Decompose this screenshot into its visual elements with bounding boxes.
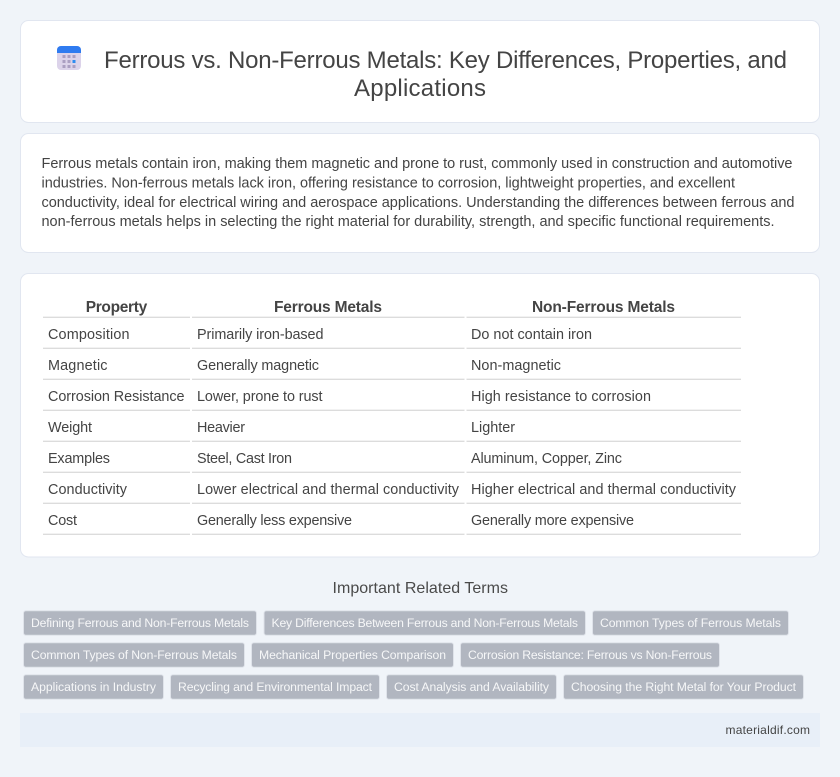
tag bbox=[252, 643, 454, 667]
tag: Recycling and Environmental Impact bbox=[178, 680, 373, 694]
footer bar: materialdif.com bbox=[726, 723, 810, 737]
table row: weight: Weight bbox=[48, 420, 92, 436]
table row: cost: Cost bbox=[48, 513, 77, 529]
tag: Key Differences Between Ferrous and Non-Ferrous Metals bbox=[272, 616, 578, 630]
tag: Defining Ferrous and Non-Ferrous Metals bbox=[31, 616, 249, 630]
table row: cost bbox=[48, 513, 634, 529]
tag bbox=[264, 611, 586, 635]
tag bbox=[592, 611, 788, 635]
table header: Non-Ferrous Metals bbox=[532, 299, 675, 316]
table row: composition: Composition bbox=[48, 327, 130, 343]
tag bbox=[386, 675, 556, 699]
text block: intro: non-ferrous metals helps in selecting the right material for durability, strength, and specific functional requirements. bbox=[42, 214, 774, 230]
table row: corrosion resistance bbox=[48, 389, 651, 405]
table row: examples: Steel, Cast Iron bbox=[197, 451, 292, 467]
tag bbox=[24, 643, 244, 667]
tag bbox=[24, 611, 256, 635]
table header bbox=[86, 299, 675, 316]
panel: title header bbox=[20, 20, 820, 122]
table row: composition: Do not contain iron bbox=[471, 327, 592, 343]
table row: corrosion resistance: Corrosion Resistance bbox=[48, 389, 184, 405]
tag bbox=[460, 643, 720, 667]
table row: examples: Aluminum, Copper, Zinc bbox=[471, 451, 622, 467]
table row: conductivity: Higher electrical and thermal conductivity bbox=[471, 482, 737, 498]
tag: Common Types of Ferrous Metals bbox=[600, 616, 781, 630]
table row: conductivity: Conductivity bbox=[48, 482, 128, 498]
icon: calendar bbox=[57, 46, 81, 70]
tag: Applications in Industry bbox=[31, 680, 157, 694]
table header: Ferrous Metals bbox=[274, 299, 382, 316]
tag: Corrosion Resistance: Ferrous vs Non-Ferrous bbox=[468, 648, 712, 662]
table row: weight: Heavier bbox=[197, 420, 245, 436]
title: Ferrous vs. Non-Ferrous Metals: Key Differences, Properties, and bbox=[104, 47, 787, 74]
title: Applications bbox=[354, 75, 486, 102]
tag: Cost Analysis and Availability bbox=[394, 680, 550, 694]
table header: Property bbox=[86, 299, 148, 316]
tag: Choosing the Right Metal for Your Product bbox=[571, 680, 797, 694]
text block: intro: industries. Non-ferrous metals lack iron, offering resistance to corrosion, lightweight properties, and excellent bbox=[42, 176, 735, 192]
table row: composition bbox=[48, 327, 592, 343]
table row: magnetic: Non-magnetic bbox=[471, 358, 561, 374]
table row: examples bbox=[48, 451, 622, 467]
title bbox=[104, 47, 787, 102]
table row: magnetic: Magnetic bbox=[48, 358, 108, 374]
table row: examples: Examples bbox=[48, 451, 110, 467]
text block: intro: Ferrous metals contain iron, making them magnetic and prone to rust, commonly used in construction and automotive bbox=[42, 156, 792, 172]
table row: cost: Generally more expensive bbox=[471, 513, 634, 529]
tag list: related terms bbox=[24, 611, 804, 699]
table row: conductivity bbox=[48, 482, 737, 498]
panel: comparison table bbox=[20, 274, 820, 557]
tag bbox=[564, 675, 804, 699]
text block: intro bbox=[42, 156, 794, 230]
panel: intro paragraph bbox=[20, 134, 820, 252]
tag bbox=[170, 675, 380, 699]
heading: related terms: Important Related Terms bbox=[332, 580, 508, 597]
tag: Mechanical Properties Comparison bbox=[259, 648, 446, 662]
table row: magnetic bbox=[48, 358, 561, 374]
text block: intro: conductivity, ideal for electrical wiring and aerospace applications. Understanding the differences between ferrous and bbox=[42, 195, 794, 211]
table row: weight: Lighter bbox=[471, 420, 515, 436]
table row: magnetic: Generally magnetic bbox=[197, 358, 319, 374]
table row: conductivity: Lower electrical and thermal conductivity bbox=[197, 482, 460, 498]
tag bbox=[24, 675, 164, 699]
table row: corrosion resistance: High resistance to corrosion bbox=[471, 389, 651, 405]
table row: composition: Primarily iron-based bbox=[197, 327, 324, 343]
tag: Common Types of Non-Ferrous Metals bbox=[31, 648, 237, 662]
footer bar bbox=[20, 713, 820, 747]
table row: weight bbox=[48, 420, 515, 436]
table row: corrosion resistance: Lower, prone to rust bbox=[197, 389, 322, 405]
table row: cost: Generally less expensive bbox=[197, 513, 352, 529]
